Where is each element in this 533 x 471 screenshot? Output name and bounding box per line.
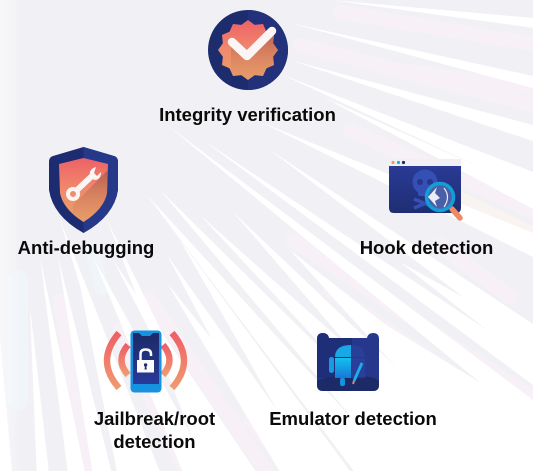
heading: emulator detection: Emulator detection	[269, 408, 437, 429]
heading: anti-debugging: Anti-debugging	[18, 237, 154, 258]
heading: jailbreak/root detection	[94, 408, 215, 452]
icon: integrity badge with check mark	[208, 10, 288, 90]
icon: shield with wrench	[49, 147, 118, 233]
heading: integrity verification: Integrity verification	[159, 104, 336, 125]
heading: jailbreak/root detection: detection	[113, 431, 196, 452]
heading: hook detection: Hook detection	[360, 237, 493, 258]
heading: jailbreak/root detection: Jailbreak/root	[94, 408, 215, 429]
